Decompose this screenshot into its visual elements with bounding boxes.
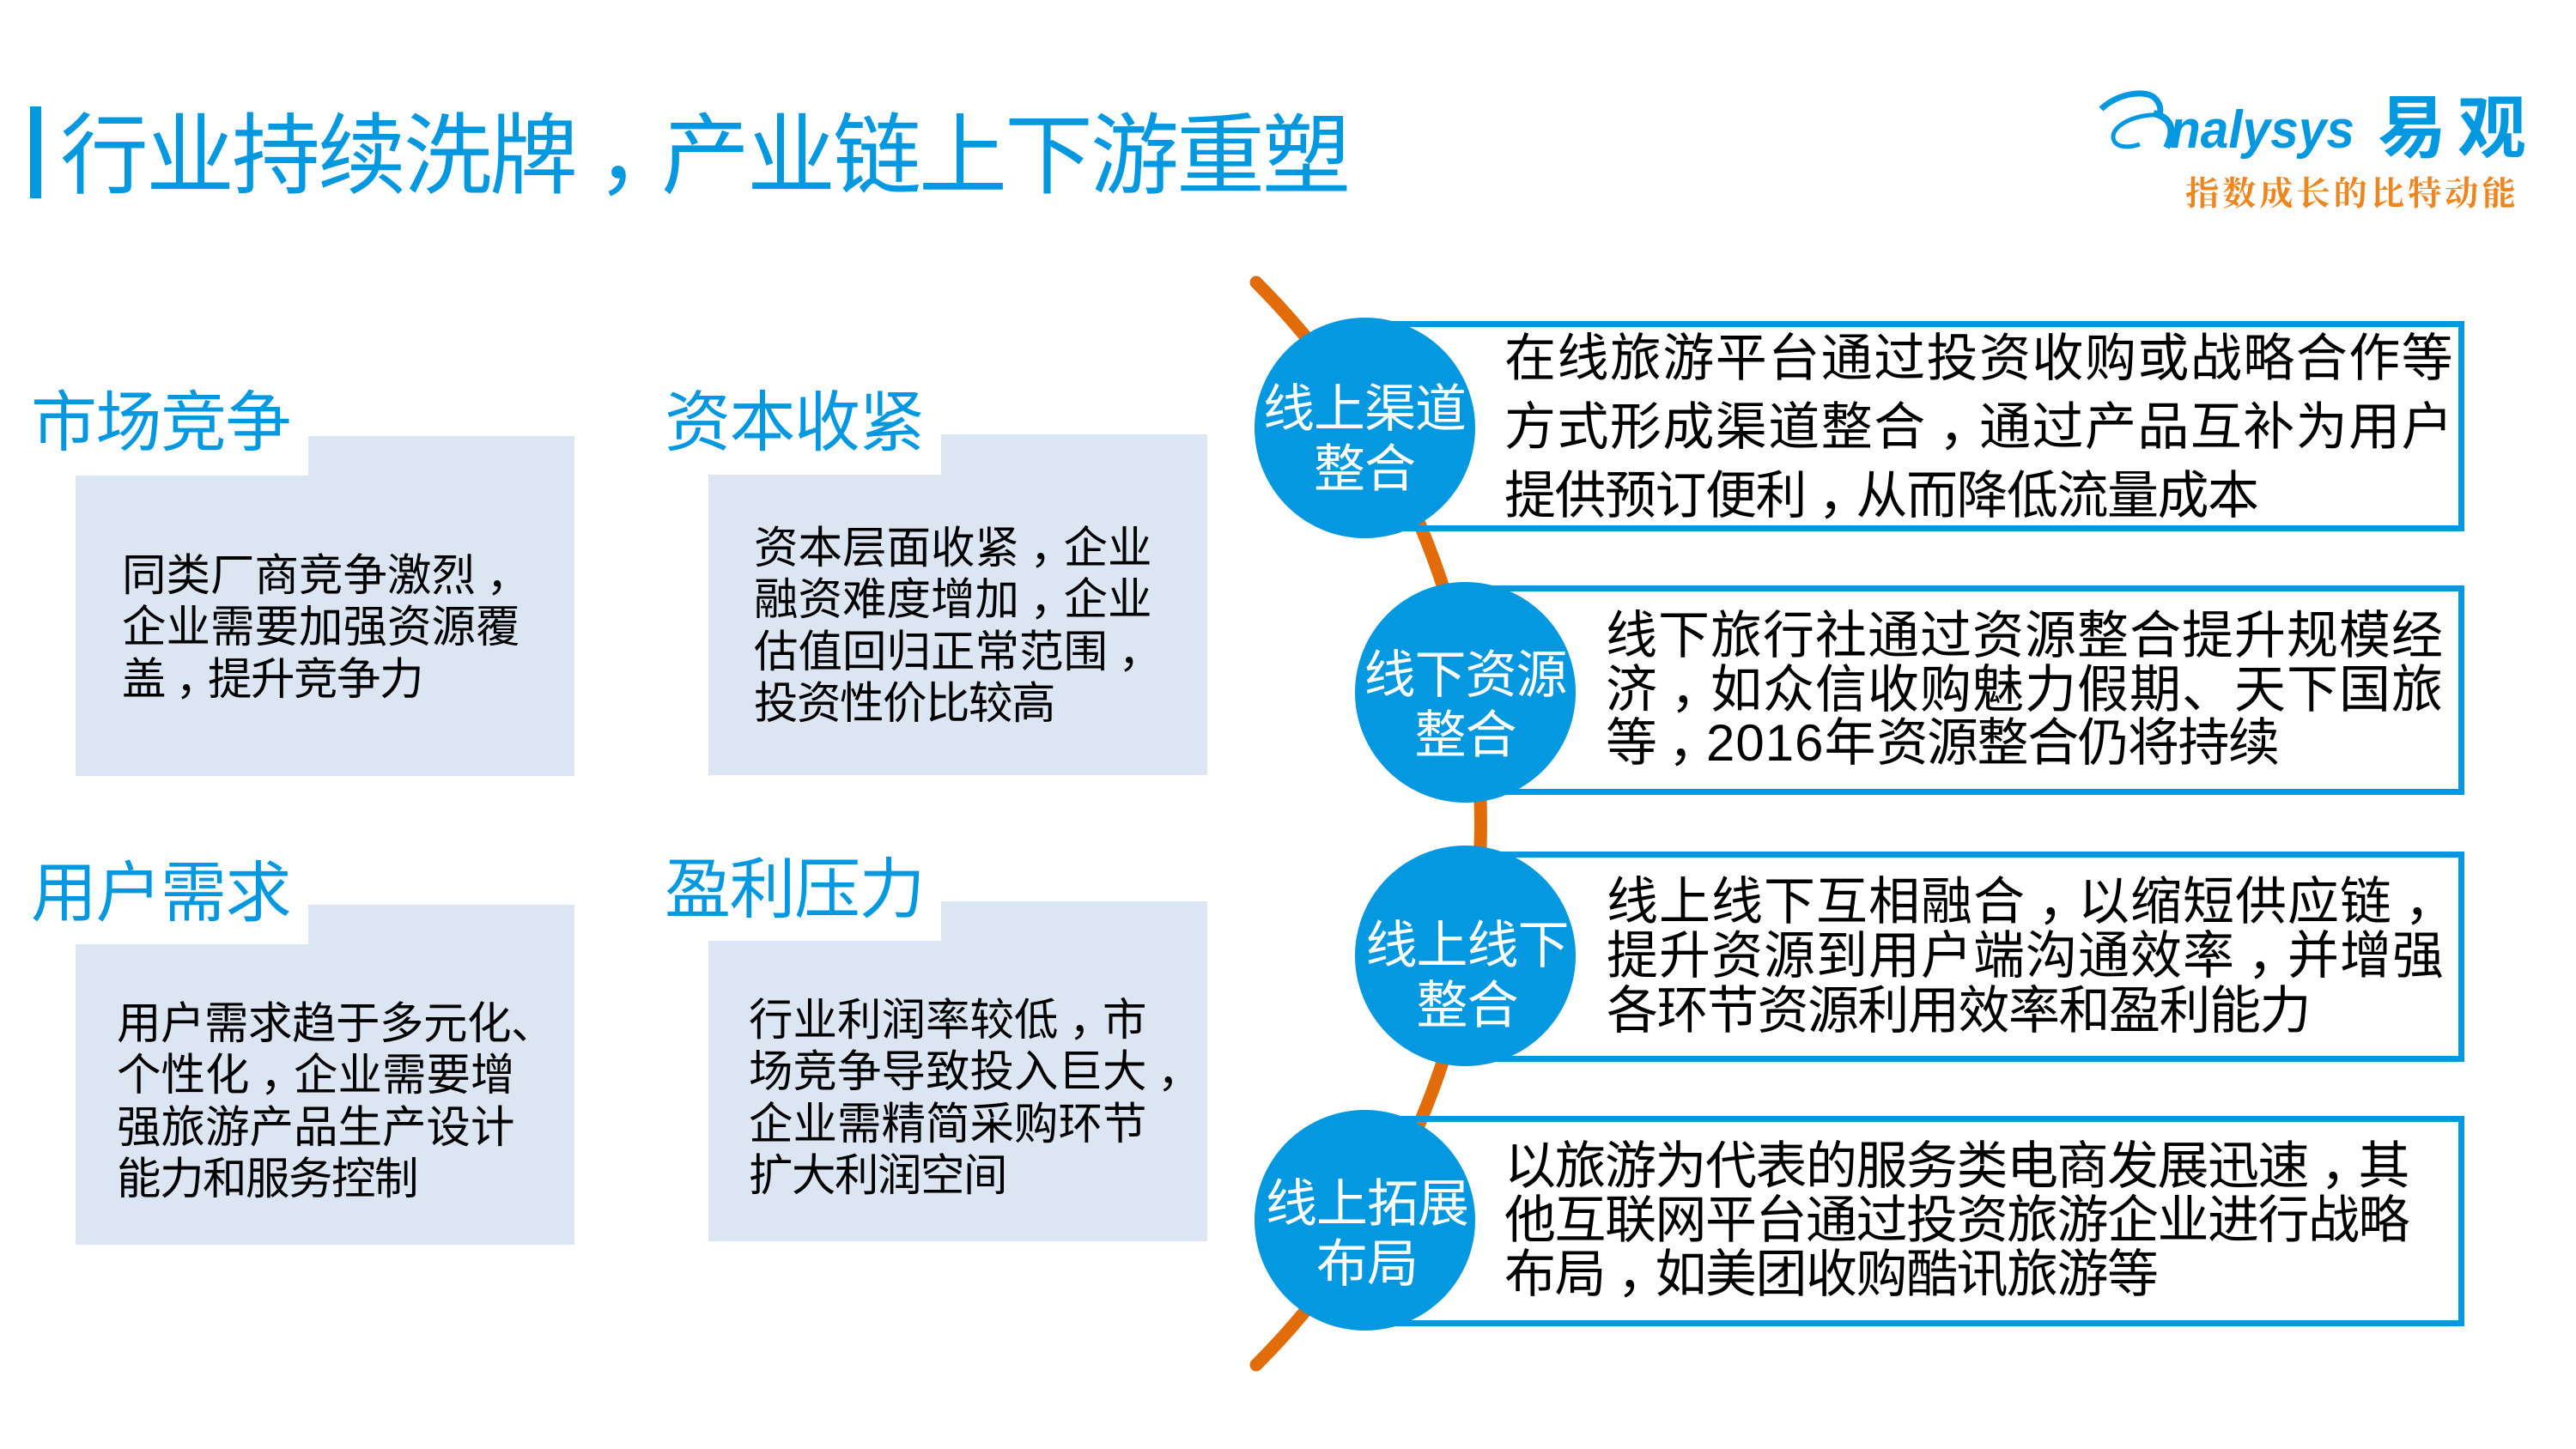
description text: 提供预订便利，从而降低流量成本: [1504, 467, 2258, 524]
logo chinese name: 易观: [2378, 90, 2533, 167]
circle label: 整合: [1415, 706, 1516, 764]
outlined text box: [1466, 852, 2464, 1062]
panel text: 资本层面收紧，企业: [754, 523, 1152, 573]
logo wordmark: nalysys: [2170, 100, 2354, 160]
title accent bar: [30, 106, 41, 198]
panel text: 行业利润率较低，市: [749, 995, 1147, 1045]
heading: 资本收紧: [665, 386, 924, 460]
heading notch: [76, 905, 308, 944]
panel text: 同类厂商竞争激烈，: [122, 550, 531, 600]
panel text: [754, 523, 1163, 728]
outlined text box: [1365, 1116, 2464, 1326]
panel text: 投资性价比较高: [754, 678, 1054, 728]
description text: 线下旅行社通过资源整合提升规模经: [1606, 607, 2444, 664]
circle label: 线上线下: [1365, 917, 1568, 974]
panel text: 企业需精简采购环节: [749, 1099, 1147, 1149]
description text: [1504, 330, 2454, 524]
panel text: 融资难度增加，企业: [754, 574, 1152, 624]
panel: 用户需求: [31, 857, 574, 1245]
description text: [1606, 607, 2444, 772]
heading notch: [708, 434, 941, 475]
logo: Analysys 易观: [2099, 90, 2533, 213]
circle label: 线上渠道: [1263, 380, 1466, 438]
panel: 盈利压力: [665, 853, 1207, 1241]
panel text: 估值回归正常范围，: [754, 627, 1163, 676]
description text: 在线旅游平台通过投资收购或战略合作等: [1504, 330, 2454, 387]
panel text: 强旅游产品生产设计: [117, 1102, 515, 1152]
blue circle with label: [1255, 1110, 1475, 1331]
orange connecting curve: [1250, 276, 1487, 1372]
blue circle with label: [1255, 318, 1475, 538]
heading notch: [708, 901, 941, 941]
circle label: 线上拓展: [1266, 1175, 1468, 1233]
panel text: [117, 998, 555, 1203]
description text: 以旅游为代表的服务类电商发展迅速，其: [1504, 1137, 2409, 1195]
panel background: [76, 905, 574, 1245]
panel text: [749, 995, 1201, 1200]
panel text: [122, 550, 531, 704]
heading: 用户需求: [31, 857, 290, 931]
heading notch: [76, 436, 308, 476]
description text: 他互联网平台通过投资旅游企业进行战略: [1504, 1191, 2409, 1249]
description text: [1607, 873, 2457, 1040]
stage 4: 线上拓展布局: [1255, 1110, 2464, 1331]
circle label: 整合: [1314, 440, 1415, 498]
title: 行业持续洗牌，产业链上下游重塑: [60, 106, 1348, 205]
description text: 提升资源到用户端沟通效率，并增强: [1607, 927, 2445, 985]
icon: logo swoosh: [2101, 94, 2171, 148]
stage 3: 线上线下整合: [1355, 846, 2464, 1066]
description text: 等，2016年资源整合仍将持续: [1606, 714, 2278, 772]
description text: 线上线下互相融合，以缩短供应链，: [1607, 873, 2457, 931]
blue circle with label: [1355, 846, 1576, 1066]
outlined text box: [1365, 321, 2464, 531]
circle label: 线下资源: [1364, 646, 1566, 704]
circle label: [1263, 380, 1466, 498]
panel: 市场竞争: [31, 386, 574, 776]
circle label: [1365, 917, 1568, 1034]
panel text: 能力和服务控制: [117, 1154, 417, 1203]
panel text: 扩大利润空间: [749, 1150, 1006, 1200]
description text: 济，如众信收购魅力假期、天下国旅: [1606, 661, 2444, 718]
panel: 资本收紧: [665, 386, 1207, 775]
panel background: [76, 436, 574, 776]
panel background: [708, 901, 1207, 1241]
description text: [1504, 1137, 2409, 1303]
heading: 盈利压力: [665, 853, 924, 927]
panel text: 用户需求趋于多元化、: [117, 998, 555, 1048]
description text: 方式形成渠道整合，通过产品互补为用户: [1504, 398, 2454, 456]
panel text: 企业需要加强资源覆: [122, 602, 520, 652]
description text: 各环节资源利用效率和盈利能力: [1607, 982, 2310, 1040]
panel background: [708, 434, 1207, 775]
outlined text box: [1466, 585, 2464, 795]
circle label: [1364, 646, 1566, 764]
circle label: [1266, 1175, 1468, 1293]
description text: 布局，如美团收购酷讯旅游等: [1504, 1246, 2157, 1303]
blue circle with label: [1355, 582, 1576, 803]
panel text: 个性化，企业需要增: [117, 1050, 515, 1100]
panel text: 场竞争导致投入巨大，: [749, 1046, 1201, 1096]
heading: 市场竞争: [31, 386, 290, 460]
stage 2: 线下资源整合: [1355, 582, 2464, 803]
panel text: 盖，提升竞争力: [122, 654, 422, 704]
circle label: 布局: [1316, 1235, 1418, 1293]
stage 1: 线上渠道整合: [1255, 318, 2464, 538]
circle label: 整合: [1417, 977, 1518, 1034]
logo tagline: 指数成长的比特动能: [2185, 176, 2519, 213]
